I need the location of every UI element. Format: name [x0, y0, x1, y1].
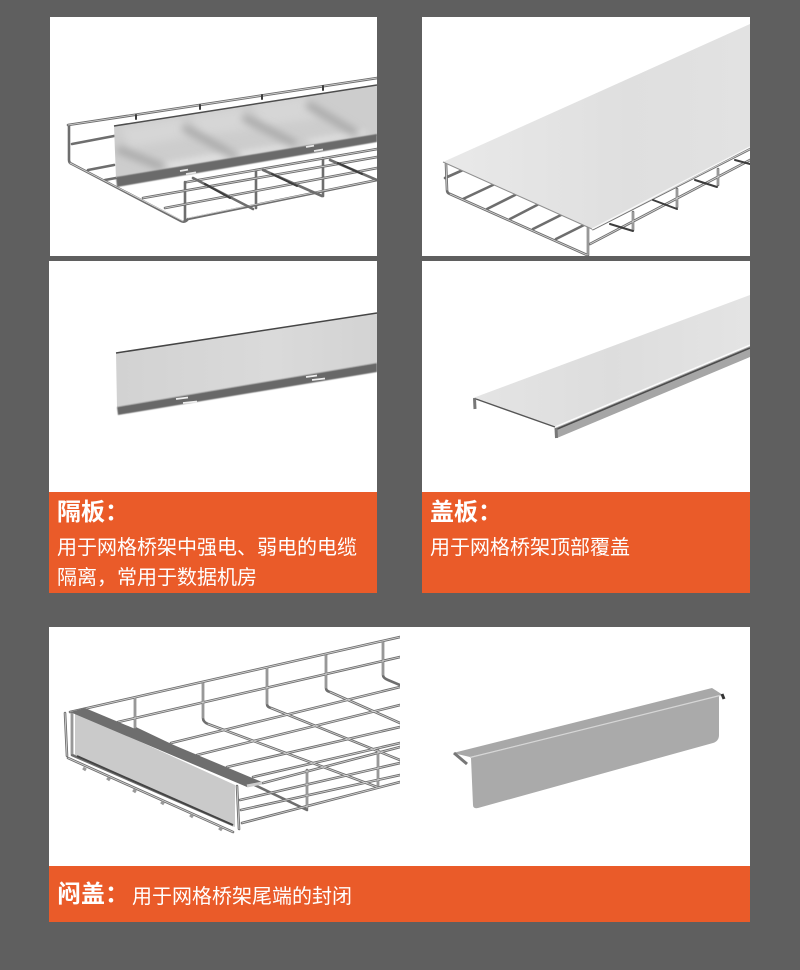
illustration: end cap plate [453, 688, 724, 808]
panel: end cap [49, 627, 750, 922]
caption bar: end cap [49, 866, 750, 922]
illustration: wire tray with divider [68, 78, 377, 222]
heading: divider: 隔板： [57, 499, 129, 526]
heading: end cap: 闷盖： [57, 881, 129, 908]
panel: divider with tray photo [50, 17, 377, 256]
illustration: wire tray with cover [443, 24, 750, 255]
panel: cover with tray photo [422, 17, 750, 256]
description: divider: 隔离，常用于数据机房 [57, 567, 257, 589]
caption bar: divider [49, 492, 377, 593]
illustration: divider plate [49, 261, 377, 492]
panel: cover [422, 261, 750, 593]
description: divider: 用于网格桥架中强电、弱电的电缆 [57, 537, 357, 559]
description: end cap: 用于网格桥架尾端的封闭 [132, 886, 352, 908]
description: divider [57, 537, 357, 589]
illustration: cover plate [422, 261, 750, 492]
caption bar: cover [422, 492, 750, 593]
panel: divider [49, 261, 377, 593]
description: cover: 用于网格桥架顶部覆盖 [430, 537, 630, 559]
illustration: wire tray with end cap [49, 627, 750, 866]
heading: cover: 盖板： [430, 499, 502, 526]
